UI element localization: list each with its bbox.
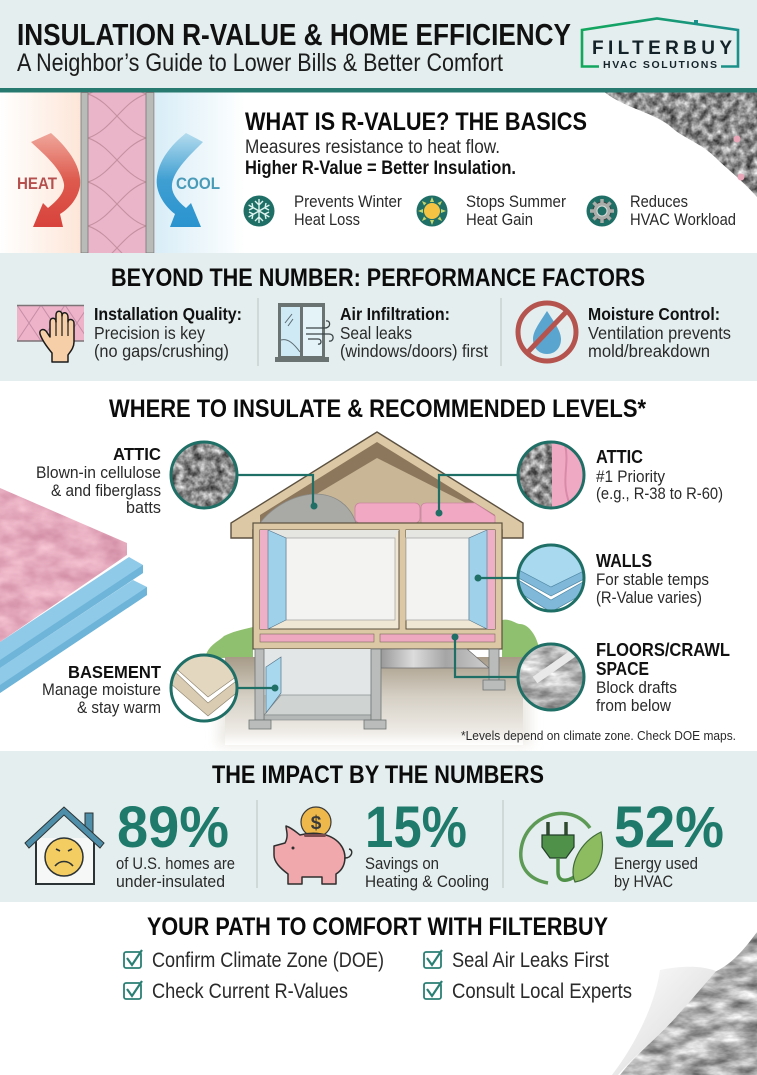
icon: sun	[416, 196, 448, 226]
heading: YOUR PATH TO COMFORT WITH FILTERBUY	[147, 913, 608, 941]
stat: 89%	[116, 795, 235, 891]
attic left label: ATTIC	[113, 444, 161, 464]
basement label: BASEMENT	[68, 662, 161, 682]
header band	[0, 0, 757, 92]
cool label: COOL	[176, 174, 220, 193]
logo: Filterbuy HVAC Solutions	[582, 18, 738, 71]
main floor walls	[253, 523, 502, 649]
attic left label	[36, 444, 161, 517]
ground and bushes	[205, 620, 540, 745]
callout: attic left circle	[171, 442, 237, 508]
stat: 15%: 15%	[365, 795, 467, 860]
basement label: Manage moisture	[42, 681, 161, 699]
icon: sad house	[25, 807, 104, 884]
insulation texture corner	[605, 92, 757, 197]
walls label	[596, 551, 709, 607]
attic right label: #1 Priority	[596, 468, 666, 486]
title: INSULATION R-VALUE & HOME EFFICIENCY	[17, 17, 571, 52]
attic left label: batts	[126, 499, 161, 517]
attic left label: Blown-in cellulose	[36, 464, 161, 482]
attic right label: ATTIC	[596, 447, 643, 467]
heading: WHAT IS R-VALUE? THE BASICS	[245, 108, 587, 136]
installation quality text: (no gaps/crushing)	[94, 341, 229, 361]
heading: THE IMPACT BY THE NUMBERS	[212, 761, 544, 789]
reduces workload text: Reduces	[630, 192, 688, 211]
wall cross-section diagram	[0, 92, 245, 253]
air infiltration text: (windows/doors) first	[340, 341, 488, 361]
installation quality text: Precision is key	[94, 323, 205, 343]
attic left label: & and fiberglass	[51, 482, 161, 500]
callout: floors circle	[518, 644, 584, 710]
stat: 52%: 52%	[614, 795, 724, 860]
installation quality text: Installation Quality:	[94, 304, 242, 324]
air infiltration text: Seal leaks	[340, 323, 412, 343]
air infiltration text	[340, 304, 488, 361]
stat: 89%: of U.S. homes are	[116, 855, 235, 873]
prevents winter text	[294, 192, 402, 229]
icon: moisture prohibited	[518, 303, 576, 361]
panel: where to insulate	[0, 395, 736, 745]
basement label: & stay warm	[77, 699, 161, 717]
reduces workload text	[630, 192, 736, 229]
panel: impact by the numbers	[0, 751, 757, 902]
moisture control text: Moisture Control:	[588, 304, 720, 324]
stat: 15%	[365, 795, 489, 891]
stat: 52%: Energy used	[614, 855, 698, 873]
icon: snowflake	[244, 196, 274, 226]
icon: plug and leaf	[521, 813, 602, 883]
floors label: FLOORS/CRAWL	[596, 640, 730, 660]
moisture control text: mold/breakdown	[588, 341, 710, 361]
walls label: For stable temps	[596, 571, 709, 589]
callout lines	[237, 475, 518, 692]
icon: hand on insulation	[17, 305, 84, 362]
logo: Filterbuy HVAC Solutions: FILTERBUY	[592, 38, 732, 59]
panel: performance factors	[0, 253, 757, 381]
panel: path to comfort	[124, 913, 757, 1075]
heading: BEYOND THE NUMBER: PERFORMANCE FACTORS	[111, 264, 645, 292]
heat label: HEAT	[17, 174, 58, 193]
attic right label	[596, 447, 723, 503]
page curl with fibre texture	[612, 932, 757, 1075]
icon: piggy bank: $	[311, 813, 322, 834]
icon: piggy bank	[274, 807, 352, 884]
moisture control text: Ventilation prevents	[588, 323, 731, 343]
definition text: Higher R-Value = Better Insulation.	[245, 158, 516, 179]
floors label	[596, 640, 730, 715]
stat: 89%: under-insulated	[116, 873, 225, 891]
roof	[231, 432, 523, 538]
installation quality text	[94, 304, 242, 361]
walls label: (R-Value varies)	[596, 589, 702, 607]
definition text: Measures resistance to heat flow.	[245, 137, 500, 158]
reduces workload text: HVAC Workload	[630, 210, 736, 229]
checklist item: climate zone: Confirm Climate Zone (DOE)	[152, 949, 384, 972]
checklist item: current R-values: Check Current R-Values	[152, 980, 348, 1003]
walls label: WALLS	[596, 551, 652, 571]
air infiltration text: Air Infiltration:	[340, 304, 450, 324]
crawl space foil	[381, 649, 489, 668]
stat: 15%: Savings on	[365, 855, 439, 873]
stops summer text	[466, 192, 566, 229]
floors label: from below	[596, 697, 671, 715]
floors label: Block drafts	[596, 679, 677, 697]
icon: gear	[586, 196, 618, 226]
definition text	[245, 137, 516, 179]
stat: 52%	[614, 795, 724, 891]
prevents winter text: Prevents Winter	[294, 192, 402, 211]
attic right label: (e.g., R-38 to R-60)	[596, 485, 723, 503]
left room	[260, 530, 399, 629]
panel: what is R-value	[0, 92, 757, 253]
stat: 89%: 89%	[117, 795, 229, 860]
prevents winter text: Heat Loss	[294, 210, 360, 229]
house cutaway diagram	[231, 432, 523, 729]
right room	[406, 530, 495, 629]
checklist item: seal air leaks: Seal Air Leaks First	[452, 949, 609, 972]
callout: walls circle	[516, 544, 586, 612]
logo: Filterbuy HVAC Solutions: HVAC SOLUTIONS	[603, 59, 717, 71]
subtitle: A Neighbor’s Guide to Lower Bills & Better Comfort	[17, 49, 503, 77]
stops summer text: Stops Summer	[466, 192, 566, 211]
callout: attic right circle	[518, 442, 585, 508]
stat: 15%: Heating & Cooling	[365, 873, 489, 891]
moisture control text	[588, 304, 731, 361]
arrow: heat	[31, 133, 80, 227]
callout: basement circle	[171, 645, 240, 721]
basement	[249, 649, 505, 729]
floor joist insulation	[260, 634, 495, 642]
insulation slabs	[0, 488, 147, 693]
stat: 52%: by HVAC	[614, 873, 673, 891]
icon: window with air leak	[275, 303, 333, 362]
attic space	[260, 442, 495, 523]
stops summer text: Heat Gain	[466, 210, 533, 229]
arrow: cool	[157, 133, 203, 227]
basement label	[42, 662, 161, 717]
heading: WHERE TO INSULATE & RECOMMENDED LEVELS*	[109, 395, 646, 423]
footnote: *Levels depend on climate zone. Check DOE maps.	[461, 728, 736, 743]
floors label: SPACE	[596, 659, 649, 679]
checklist item: local experts: Consult Local Experts	[452, 980, 632, 1003]
